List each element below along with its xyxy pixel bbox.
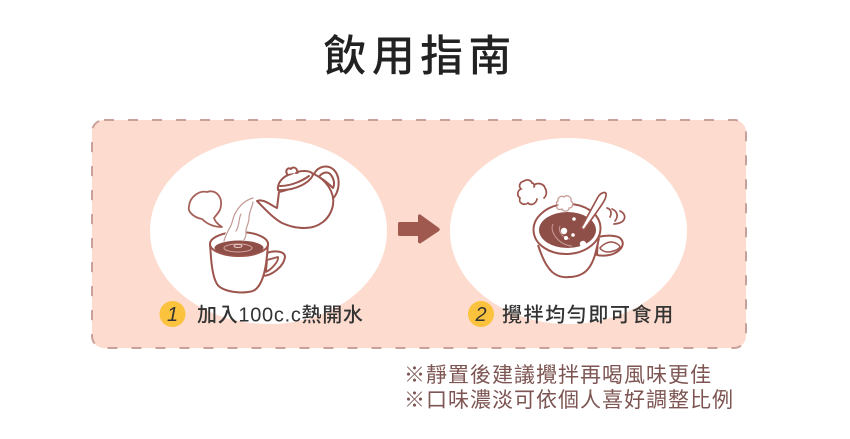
icon: teapot xyxy=(257,167,339,228)
step 1 label: 加入100c.c熱開水 xyxy=(197,304,364,326)
icon: stirred cup xyxy=(532,193,625,277)
step 2 badge xyxy=(468,301,494,327)
icon: arrow xyxy=(398,214,440,243)
title: 飲用指南 xyxy=(324,33,517,81)
footnote line 1: ※靜置後建議攪拌再喝風味更佳 xyxy=(404,364,712,387)
panel: steps xyxy=(92,120,746,348)
step 1 badge: 1 xyxy=(167,304,178,326)
icon: coffee cup xyxy=(210,232,285,292)
icon: steam puff large xyxy=(518,180,546,204)
step 1 badge xyxy=(160,301,186,327)
step 2 backdrop xyxy=(450,138,687,324)
icon: speech bubble steam xyxy=(189,191,222,227)
step 1 backdrop xyxy=(150,138,387,324)
footnote line 2: ※口味濃淡可依個人喜好調整比例 xyxy=(404,389,734,412)
step 2 label: 攪拌均勻即可食用 xyxy=(502,304,675,326)
icon: pouring water xyxy=(223,198,253,241)
step 2 badge: 2 xyxy=(474,304,487,326)
footnotes xyxy=(404,364,734,412)
icon: steam puff small xyxy=(556,196,573,211)
